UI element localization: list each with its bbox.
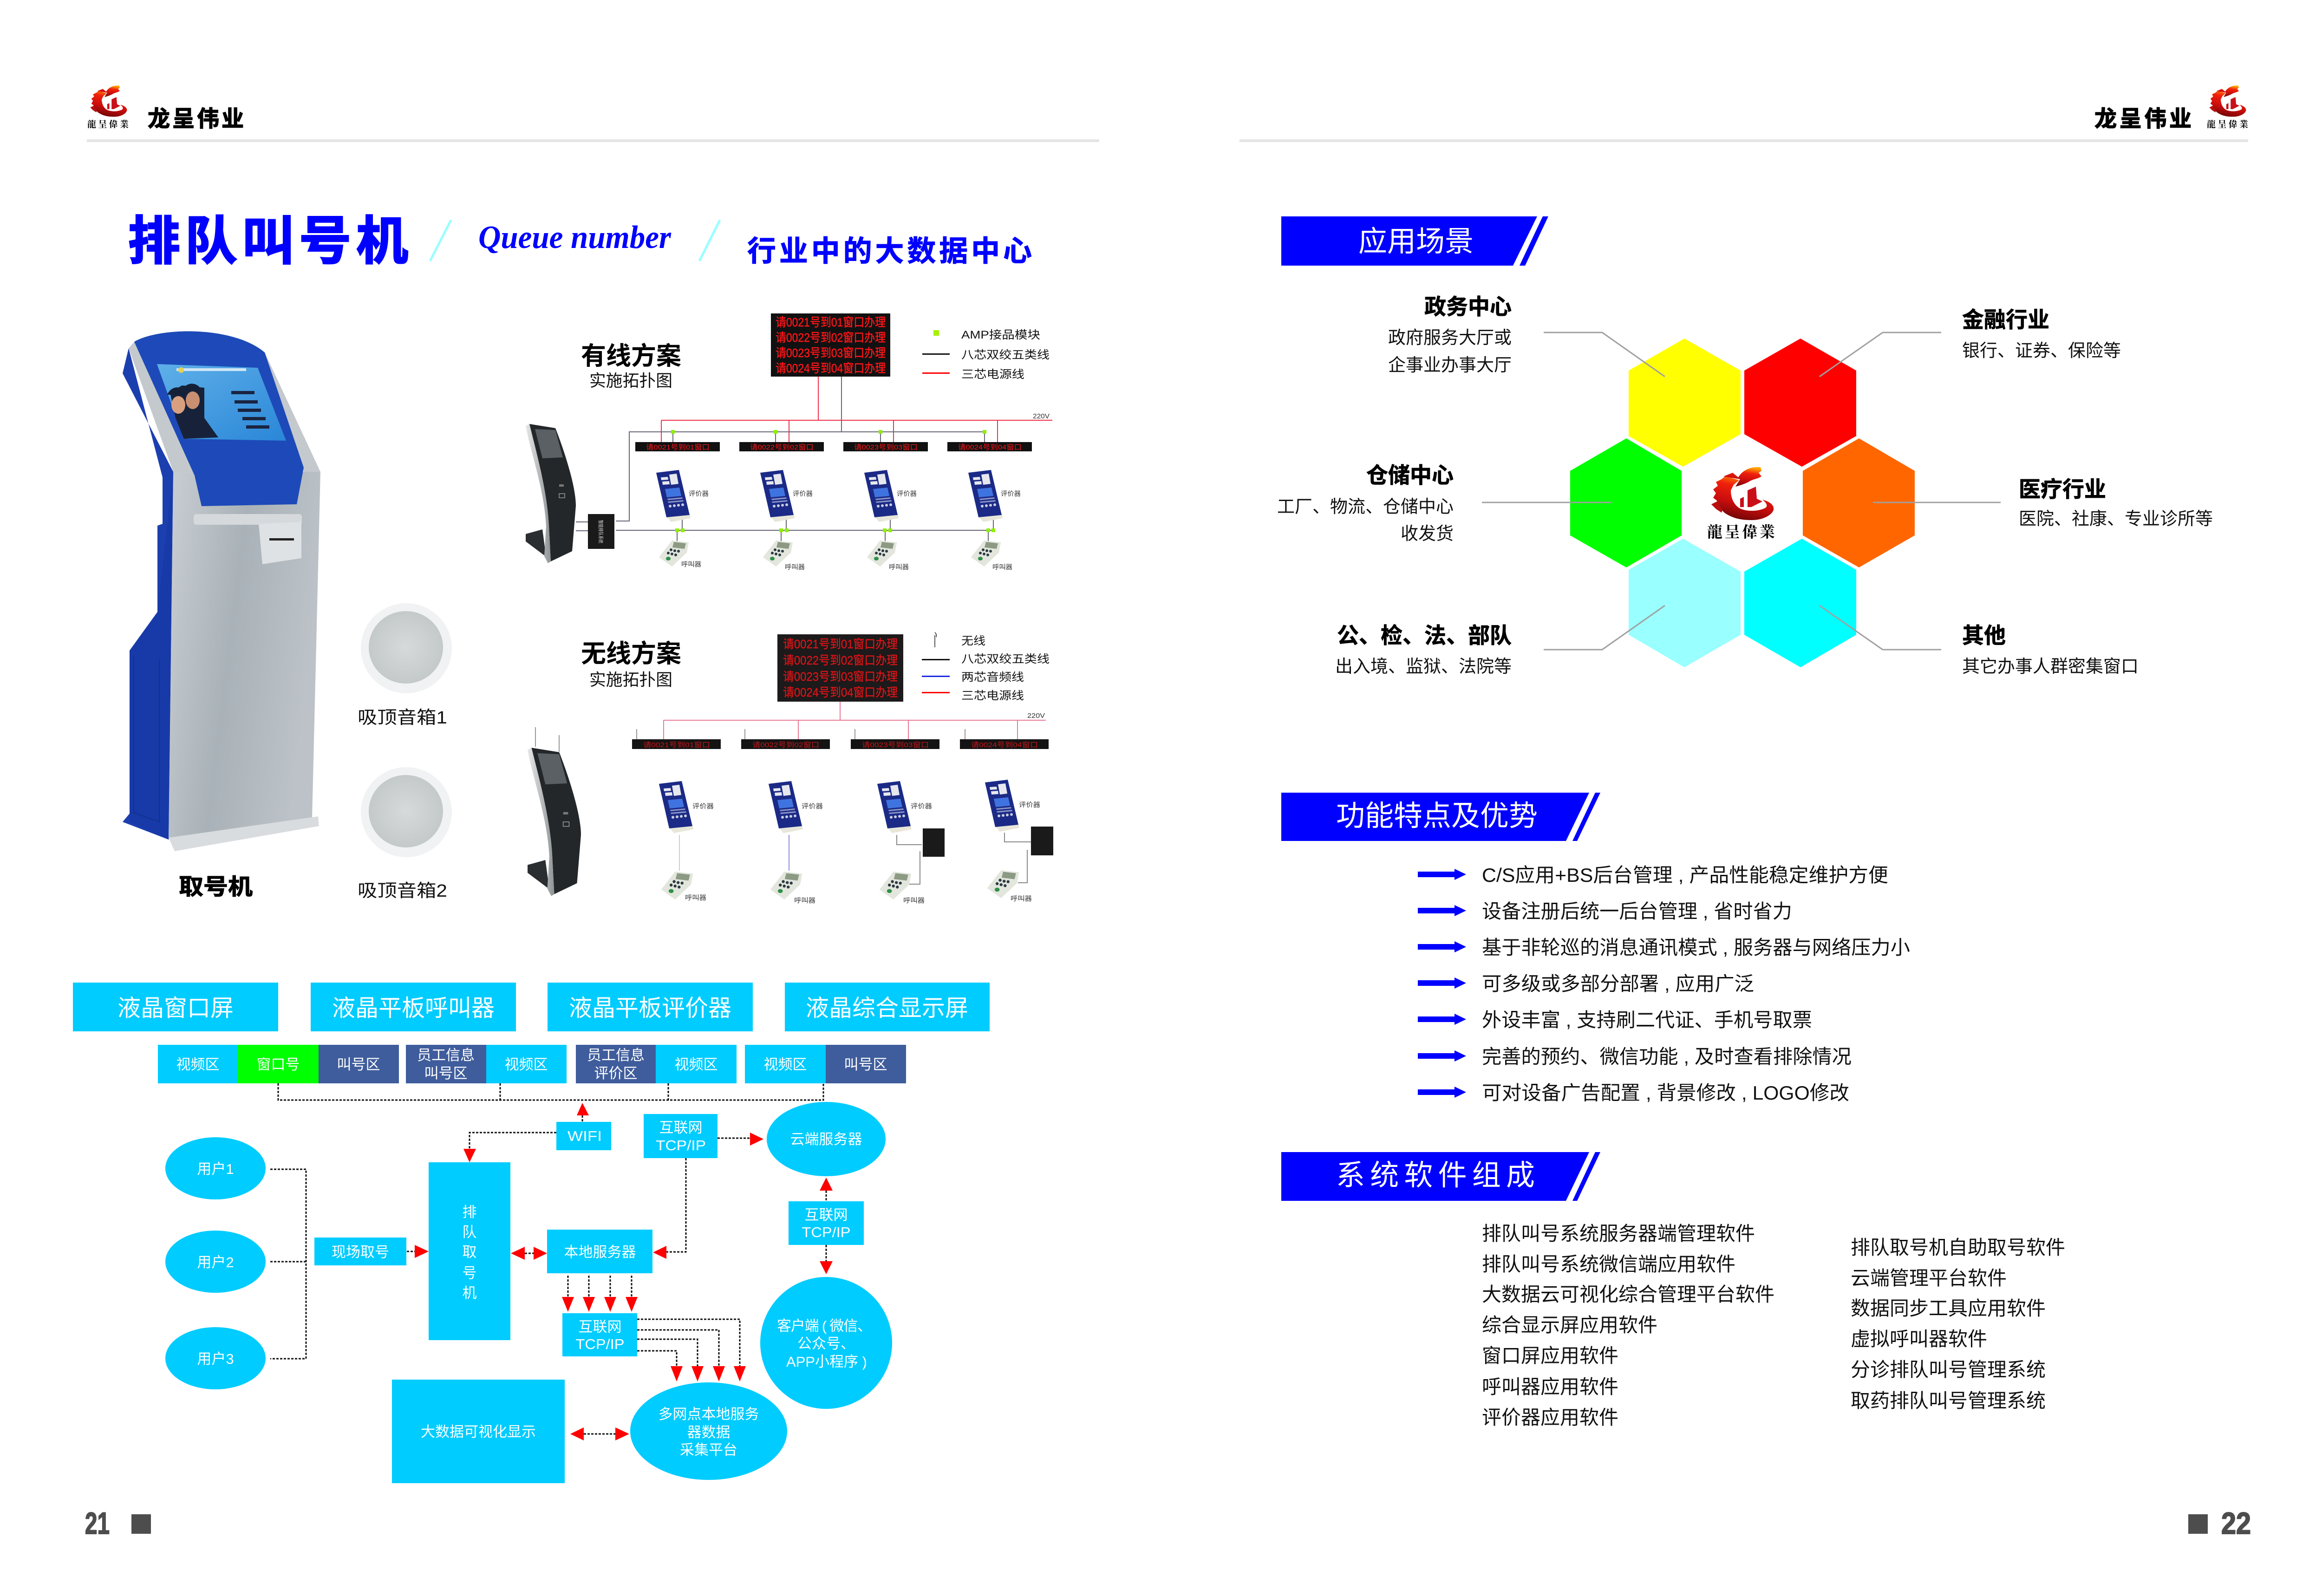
node: internet middle: 互联网 — [579, 1319, 621, 1335]
scenario: warehouse: 仓储中心 — [1366, 463, 1454, 488]
scenario: government: 企事业办事大厅 — [1388, 356, 1512, 375]
feature text: 外设丰富 , 支持刷二代证、手机号取票 — [1482, 1009, 1812, 1031]
window LED displays: 请0023号到03窗口 — [854, 443, 918, 451]
callers: 呼叫器 — [794, 897, 815, 904]
controller box — [588, 514, 614, 549]
feature text: 可对设备广告配置 , 背景修改 , LOGO修改 — [1482, 1082, 1849, 1104]
feature text: 完善的预约、微信功能 , 及时查看排除情况 — [1482, 1046, 1852, 1068]
node: internet right: 互联网 — [804, 1207, 848, 1223]
window LED displays: 请0022号到02窗口 — [750, 443, 814, 451]
scenario: medical — [2019, 477, 2213, 529]
green connectors — [671, 430, 995, 532]
node: queue machine: 队 — [463, 1224, 476, 1240]
evaluators: 评价器 — [911, 802, 932, 810]
evaluators: 评价器 — [1001, 490, 1021, 497]
evaluators: 评价器 — [897, 490, 917, 497]
flow connectors — [270, 1083, 826, 1434]
legend: 无线 — [961, 635, 985, 647]
label: 220V: 220V — [1033, 412, 1050, 420]
node: client: 客户端 ( 微信、 — [777, 1318, 872, 1334]
software list left: 排队叫号系统微信端应用软件 — [1482, 1253, 1735, 1275]
callers: 呼叫器 — [889, 563, 909, 571]
main LED display: 请0021号到01窗口办理 — [776, 315, 886, 329]
software list left: 呼叫器应用软件 — [1482, 1376, 1618, 1398]
evaluators — [659, 780, 1040, 833]
callers — [661, 870, 1032, 904]
panel: screen zones: 评价区 — [594, 1065, 637, 1081]
scenario: other — [1962, 623, 2139, 677]
node: internet top: 互联网 — [659, 1120, 702, 1136]
legend — [922, 632, 1050, 702]
label: speaker 1: 吸顶音箱1 — [358, 708, 447, 728]
scenario: finance: 金融行业 — [1962, 307, 2049, 332]
legend: AMP接品模块 — [961, 329, 1040, 341]
left page header — [87, 85, 1099, 142]
callers: 呼叫器 — [681, 560, 701, 568]
legend: 三芯电源线 — [961, 368, 1024, 381]
panel: screen zones — [158, 1045, 906, 1083]
wiring — [576, 377, 1052, 541]
scenario: other: 其他 — [1962, 623, 2006, 648]
title: 行业中的大数据中心 — [747, 235, 1032, 267]
heading: wired plan: 有线方案 — [581, 342, 681, 370]
main LED display: 请0024号到04窗口办理 — [776, 361, 886, 375]
scenario: finance: 银行、证券、保险等 — [1962, 341, 2121, 361]
banner: features — [1281, 793, 1600, 841]
legend: 八芯双绞五类线 — [961, 653, 1050, 665]
panel: product buttons — [73, 983, 990, 1031]
scenario: warehouse: 工厂、物流、仓储中心 — [1277, 497, 1454, 517]
hexagon diagram — [1482, 332, 2001, 667]
scenario: warehouse — [1277, 463, 1454, 544]
kiosk illustration — [123, 331, 320, 851]
callers: 呼叫器 — [992, 563, 1012, 571]
title — [128, 212, 1032, 270]
node: multi-site platform: 多网点本地服务 — [659, 1406, 759, 1422]
main LED display: 请0024号到04窗口办理 — [783, 685, 898, 699]
title: Queue number — [478, 220, 672, 255]
page number right — [2188, 1506, 2251, 1540]
window LED displays: 请0024号到04窗口 — [958, 443, 1022, 451]
node: internet middle: TCP/IP — [576, 1336, 624, 1352]
evaluators — [656, 470, 1021, 522]
icon: ceiling speaker 2 — [361, 767, 452, 857]
legend — [922, 329, 1050, 381]
node: internet right — [789, 1201, 864, 1245]
window LED displays — [632, 739, 1049, 749]
scenario: government: 政府服务大厅或 — [1388, 328, 1512, 348]
node: user 1: 用户1 — [197, 1161, 234, 1177]
hexagon: cyan — [1744, 539, 1856, 667]
window LED displays — [635, 442, 1032, 451]
icon: center logo — [1707, 467, 1775, 542]
scenario: public security: 公、检、法、部队 — [1337, 623, 1512, 648]
title: 排队叫号机 — [128, 212, 408, 270]
right page header — [1239, 85, 2248, 142]
controller box: 智能排队系统 — [598, 520, 604, 543]
node: queue machine — [429, 1162, 510, 1340]
panel: wireless topology — [528, 632, 1053, 904]
panel: product buttons: 液晶窗口屏 — [117, 995, 234, 1021]
panel: screen zones: 叫号区 — [424, 1065, 467, 1081]
window LED displays: 请0024号到04窗口 — [971, 741, 1038, 749]
feature text: C/S应用+BS后台管理 , 产品性能稳定维护方便 — [1482, 864, 1888, 886]
icon: company logo left: 龍呈偉業 — [87, 117, 129, 130]
software list right: 云端管理平台软件 — [1851, 1267, 2007, 1289]
panel: screen zones: 视频区 — [674, 1056, 718, 1073]
icon: center logo: 龍呈偉業 — [1707, 520, 1775, 542]
node: user 2 — [165, 1231, 266, 1293]
scenario: government: 政务中心 — [1424, 294, 1512, 319]
company name left: 龙呈伟业 — [148, 107, 244, 131]
icon: company logo left — [87, 85, 129, 130]
node: on-site ticket — [314, 1238, 406, 1265]
callers: 呼叫器 — [1011, 895, 1032, 902]
node: queue machine: 号 — [463, 1265, 476, 1281]
node: user 3 — [165, 1327, 266, 1389]
banner: software — [1281, 1152, 1600, 1201]
main LED display: 请0023号到03窗口办理 — [783, 670, 898, 684]
node: queue machine: 机 — [463, 1285, 476, 1301]
panel: screen zones: 叫号区 — [844, 1056, 887, 1073]
node: big data display: 大数据可视化显示 — [421, 1424, 536, 1440]
panel: screen zones: 员工信息 — [587, 1047, 645, 1063]
legend: 两芯音频线 — [961, 671, 1024, 684]
evaluators: 评价器 — [692, 802, 714, 810]
page number left: 21 — [85, 1506, 110, 1540]
label: kiosk: 取号机 — [179, 875, 253, 899]
kiosk small — [528, 748, 581, 896]
label: 220V: 220V — [1027, 712, 1045, 720]
evaluators: 评价器 — [689, 490, 709, 497]
scenario: medical: 医疗行业 — [2019, 477, 2106, 502]
node: multi-site platform — [630, 1382, 787, 1480]
scenario: warehouse: 收发货 — [1401, 524, 1454, 544]
hexagon: red — [1744, 339, 1856, 467]
software list left: 排队叫号系统服务器端管理软件 — [1482, 1223, 1755, 1244]
software list left: 窗口屏应用软件 — [1482, 1345, 1618, 1367]
scenario: government — [1388, 294, 1512, 375]
node: local server: 本地服务器 — [564, 1244, 636, 1260]
panel: screen zones: 窗口号 — [256, 1056, 300, 1073]
node: client — [760, 1277, 892, 1409]
main LED display — [771, 313, 890, 377]
node: queue machine: 取 — [463, 1244, 476, 1260]
node: client: APP小程序 ) — [786, 1354, 867, 1370]
node: internet top — [644, 1114, 717, 1158]
legend: 三芯电源线 — [961, 690, 1024, 702]
scenario: medical: 医院、社康、专业诊所等 — [2019, 509, 2213, 529]
node: multi-site platform: 器数据 — [687, 1424, 730, 1440]
software list right: 虚拟呼叫器软件 — [1851, 1328, 1987, 1350]
scenario: public security: 出入境、监狱、法院等 — [1335, 657, 1512, 677]
hexagon: light cyan — [1629, 539, 1741, 667]
sub heading: 实施拓扑图 — [589, 670, 672, 689]
software list left: 综合显示屏应用软件 — [1482, 1314, 1657, 1336]
evaluators: 评价器 — [1019, 801, 1040, 808]
window LED displays: 请0023号到03窗口 — [862, 741, 929, 749]
scenario: public security — [1335, 623, 1512, 677]
callers — [659, 541, 1012, 571]
main LED display: 请0023号到03窗口办理 — [776, 346, 886, 360]
node: queue machine: 排 — [463, 1204, 476, 1220]
panel: screen zones: 视频区 — [763, 1056, 807, 1073]
feature text: 可多级或多部分部署 , 应用广泛 — [1482, 973, 1754, 995]
node: cloud server: 云端服务器 — [790, 1131, 862, 1147]
panel: product buttons: 液晶平板呼叫器 — [332, 995, 495, 1021]
page number right: 22 — [2221, 1506, 2251, 1540]
node: internet right: TCP/IP — [802, 1224, 851, 1240]
feature text: 基于非轮巡的消息通讯模式 , 服务器与网络压力小 — [1482, 937, 1910, 958]
feature list — [1418, 864, 1910, 1104]
page number left — [85, 1506, 151, 1540]
main LED display — [777, 634, 903, 702]
wireless boxes — [923, 827, 1053, 857]
node: internet middle — [562, 1313, 637, 1356]
node: multi-site platform: 采集平台 — [680, 1442, 737, 1458]
node: cloud server — [767, 1102, 886, 1176]
sub heading: 实施拓扑图 — [589, 371, 672, 390]
banner: software: 系统软件组成 — [1336, 1160, 1535, 1192]
icon: ceiling speaker 1 — [361, 603, 452, 693]
banner: application scenarios: 应用场景 — [1358, 226, 1474, 258]
software list left: 大数据云可视化综合管理平台软件 — [1482, 1283, 1774, 1305]
software list left — [1482, 1223, 1774, 1428]
main LED display: 请0022号到02窗口办理 — [783, 653, 898, 667]
software list right: 数据同步工具应用软件 — [1851, 1297, 2046, 1319]
window LED displays: 请0022号到02窗口 — [752, 741, 819, 749]
kiosk small — [526, 424, 576, 563]
company name right: 龙呈伟业 — [2094, 107, 2192, 131]
banner: application scenarios — [1281, 216, 1548, 266]
evaluators: 评价器 — [793, 490, 813, 497]
leader lines — [1482, 332, 2001, 650]
node: user 1 — [165, 1137, 266, 1199]
icon: company logo right: 龍呈偉業 — [2207, 117, 2248, 130]
main LED display: 请0021号到01窗口办理 — [783, 637, 898, 651]
label: speaker 2: 吸顶音箱2 — [358, 881, 447, 901]
callers: 呼叫器 — [903, 897, 925, 904]
hexagon: green — [1570, 438, 1682, 567]
panel: screen zones: 视频区 — [176, 1056, 219, 1073]
red arrows — [415, 1103, 833, 1440]
node: big data display — [392, 1380, 565, 1483]
callers: 呼叫器 — [685, 894, 706, 901]
node: user 2: 用户2 — [197, 1254, 234, 1270]
main LED display: 请0022号到02窗口办理 — [776, 331, 886, 345]
legend: 八芯双绞五类线 — [961, 349, 1050, 361]
wiring — [535, 702, 1046, 884]
hexagon: yellow — [1629, 339, 1741, 467]
node: user 3: 用户3 — [197, 1351, 234, 1367]
window LED displays: 请0021号到01窗口 — [643, 741, 710, 749]
panel: product buttons: 液晶综合显示屏 — [806, 995, 968, 1021]
software list right: 分诊排队叫号管理系统 — [1851, 1359, 2046, 1381]
arrows — [1418, 869, 1466, 1098]
software list right: 取药排队叫号管理系统 — [1851, 1390, 2046, 1412]
node: local server — [547, 1230, 652, 1273]
node: internet top: TCP/IP — [656, 1137, 706, 1153]
software list right: 排队取号机自助取号软件 — [1851, 1237, 2065, 1258]
feature text — [1482, 864, 1910, 1104]
node: WIFI: WIFI — [567, 1128, 602, 1144]
heading: wireless plan: 无线方案 — [581, 640, 681, 668]
hexagon: orange — [1803, 438, 1915, 567]
software list left: 评价器应用软件 — [1482, 1407, 1618, 1428]
panel: screen zones: 叫号区 — [337, 1056, 380, 1073]
callers: 呼叫器 — [785, 563, 805, 571]
banner: features: 功能特点及优势 — [1336, 800, 1538, 832]
software list right — [1851, 1237, 2065, 1412]
icon: company logo right — [2207, 85, 2248, 130]
panel: product buttons: 液晶平板评价器 — [569, 995, 731, 1021]
panel: wired topology — [526, 313, 1052, 571]
node: client: 公众号、 — [797, 1335, 855, 1352]
panel: screen zones: 视频区 — [504, 1056, 548, 1073]
scenario: other: 其它办事人群密集窗口 — [1962, 657, 2139, 677]
evaluators: 评价器 — [802, 802, 823, 810]
node: on-site ticket: 现场取号 — [332, 1244, 389, 1260]
feature text: 设备注册后统一后台管理 , 省时省力 — [1482, 900, 1792, 922]
node: WIFI — [556, 1122, 611, 1150]
scenario: finance — [1962, 307, 2121, 361]
panel: screen zones: 员工信息 — [417, 1047, 475, 1063]
window LED displays: 请0021号到01窗口 — [646, 443, 710, 451]
